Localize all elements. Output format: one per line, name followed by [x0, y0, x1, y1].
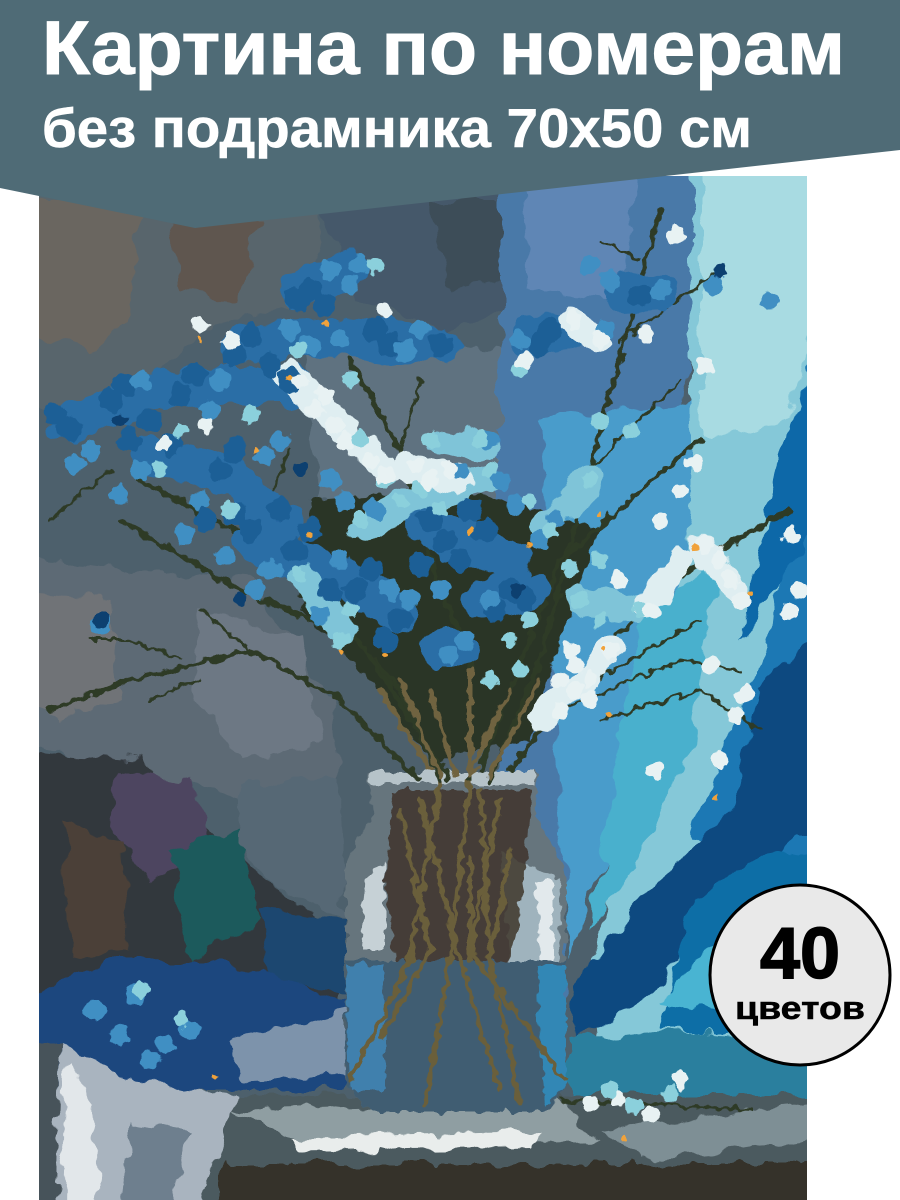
title: Картина по номерам — [42, 6, 845, 91]
subtitle: без подрамника 70х50 см — [42, 97, 752, 159]
badge: 40 colours: 40 — [760, 914, 840, 994]
stems and twigs — [50, 210, 790, 1110]
flowers: blue and white blossoms — [55, 235, 800, 1140]
background: wall patches — [39, 196, 506, 999]
table and blue cloth — [20, 960, 830, 1200]
badge: 40 colours: цветов — [735, 990, 865, 1026]
vase — [346, 772, 566, 1112]
flower masses — [70, 270, 735, 715]
banner — [0, 0, 900, 228]
background: curtain — [500, 160, 830, 1100]
painting: bouquet in a glass vase — [20, 160, 830, 1200]
white cloth — [20, 1040, 235, 1200]
badge: 40 colours — [710, 885, 890, 1065]
